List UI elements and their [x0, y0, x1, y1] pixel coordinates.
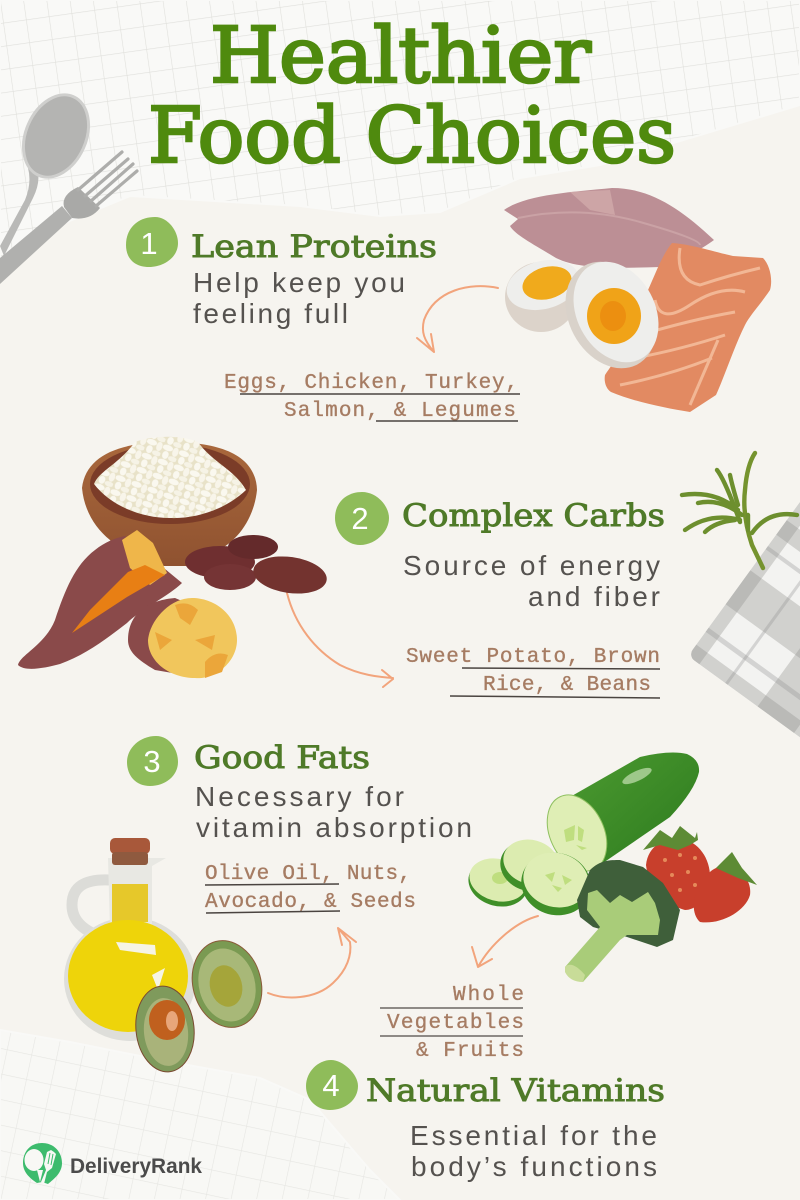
examples: Sweet Potato, Brown	[406, 646, 660, 669]
logo: DeliveryRank: DeliveryRank	[70, 1155, 202, 1178]
bottom grid paper	[0, 1030, 400, 1200]
icon: circle with spoon and fork	[23, 1143, 62, 1184]
description: Essential for the	[410, 1120, 657, 1151]
heading: good fats: Good Fats	[194, 740, 370, 776]
description	[410, 1120, 657, 1182]
description: Necessary for	[195, 781, 404, 812]
description: feeling full	[193, 298, 348, 329]
section 2: complex carbs	[18, 437, 665, 698]
section 3: good fats	[64, 736, 472, 1075]
illustration: rice bowl, sweet potato, beans	[18, 437, 329, 678]
badge 2	[335, 492, 389, 545]
title: Healthier	[210, 12, 591, 101]
heading: natural vitamins: Natural Vitamins	[366, 1073, 665, 1109]
badge 2: 2	[351, 501, 369, 536]
arrow	[472, 916, 538, 967]
description: and fiber	[528, 581, 660, 612]
examples	[224, 372, 520, 423]
badge 3: 3	[143, 744, 161, 779]
section 4: natural vitamins	[306, 753, 757, 1182]
description: vitamin absorption	[196, 812, 472, 843]
description: Help keep you	[193, 267, 405, 298]
examples: & Fruits	[416, 1040, 524, 1063]
title: Food Choices	[148, 92, 676, 181]
examples: Avocado, & Seeds	[205, 891, 416, 914]
illustration: cucumber, broccoli, strawberries	[463, 753, 757, 982]
title	[148, 12, 676, 181]
examples: Rice, & Beans	[483, 674, 651, 697]
top grid paper	[0, 0, 800, 262]
examples: Eggs, Chicken, Turkey,	[224, 372, 518, 395]
examples: Salmon, & Legumes	[284, 400, 516, 423]
examples	[406, 646, 660, 698]
illustration: chicken, eggs, salmon	[501, 188, 771, 412]
illustration: olive oil and avocado	[64, 838, 271, 1075]
description	[403, 550, 660, 612]
illustration: napkin and rosemary	[682, 453, 800, 774]
examples	[380, 984, 524, 1063]
heading: lean proteins: Lean Proteins	[191, 229, 437, 265]
examples: Olive Oil, Nuts,	[205, 863, 411, 886]
arrow	[417, 286, 498, 352]
description	[195, 781, 472, 843]
badge 4	[306, 1060, 358, 1110]
heading: complex carbs: Complex Carbs	[402, 498, 665, 534]
examples: Whole	[453, 984, 524, 1007]
arrow	[287, 593, 393, 687]
section 1: lean proteins	[126, 188, 771, 423]
examples	[205, 863, 416, 914]
logo: DeliveryRank	[23, 1143, 202, 1184]
description: Source of energy	[403, 550, 660, 581]
description	[193, 267, 405, 329]
badge 1	[126, 217, 178, 267]
examples: Vegetables	[387, 1012, 524, 1035]
badge 4: 4	[322, 1068, 340, 1103]
badge 1: 1	[140, 226, 158, 261]
badge 3	[127, 736, 178, 786]
description: body’s functions	[411, 1151, 657, 1182]
arrow	[268, 928, 356, 997]
icon: spoon and fork	[0, 85, 137, 284]
